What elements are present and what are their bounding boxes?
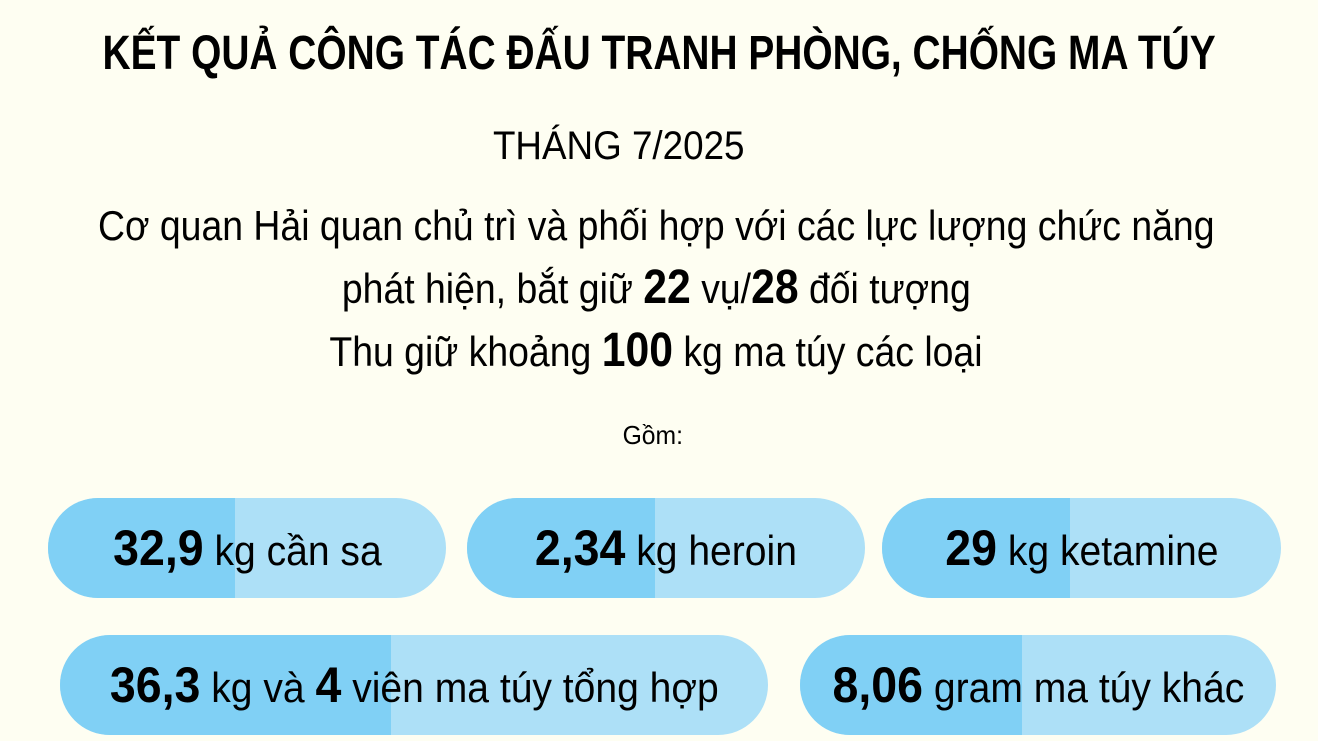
title: KẾT QUẢ CÔNG TÁC ĐẤU TRANH PHÒNG, CHỐNG MA TÚY	[102, 27, 1216, 80]
pill: heroin: 2,34 kg heroin	[535, 520, 797, 576]
pill: other drugs: 8,06 gram ma túy khác	[832, 657, 1244, 713]
subtitle: month: THÁNG 7/2025	[493, 124, 745, 168]
pill: synthetic drugs: 36,3 kg và 4 viên ma túy tổng hợp	[110, 657, 718, 713]
pill: cannabis	[48, 498, 446, 598]
summary text: phát hiện, bắt giữ 22 vụ/28 đối tượng	[342, 261, 970, 314]
label: includes: Gồm:	[623, 420, 683, 450]
pill: other drugs	[800, 635, 1276, 735]
summary text: Thu giữ khoảng 100 kg ma túy các loại	[329, 324, 983, 377]
pill: heroin	[467, 498, 865, 598]
pill: ketamine	[882, 498, 1281, 598]
pill: cannabis: 32,9 kg cần sa	[113, 520, 381, 576]
pill: ketamine: 29 kg ketamine	[945, 520, 1218, 576]
pill: synthetic drugs	[60, 635, 768, 735]
summary text: Cơ quan Hải quan chủ trì và phối hợp với các lực lượng chức năng	[98, 202, 1214, 249]
summary text	[98, 202, 1214, 377]
